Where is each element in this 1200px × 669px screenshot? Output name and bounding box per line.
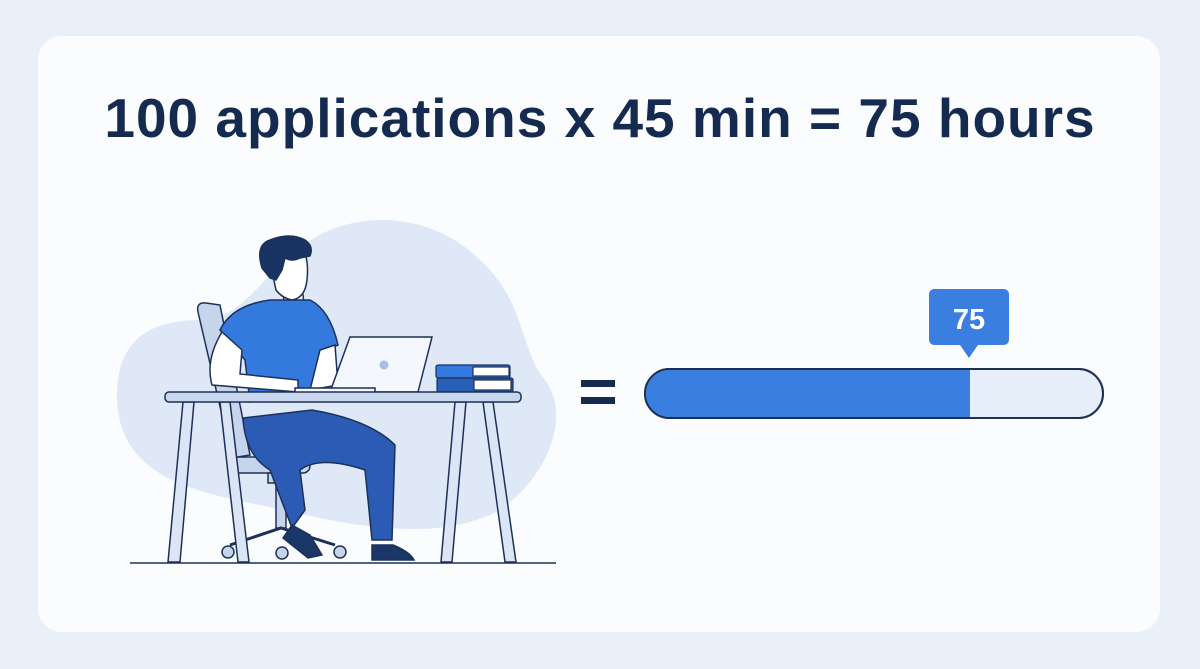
chair xyxy=(198,303,346,559)
tooltip: 75: 75 xyxy=(953,304,985,336)
floor line xyxy=(130,562,556,564)
title: 100 applications x 45 min = 75 hours xyxy=(104,87,1096,149)
equals sign xyxy=(581,380,615,404)
tooltip: 75 xyxy=(929,289,1009,358)
books xyxy=(436,365,513,392)
background blob xyxy=(117,220,556,529)
laptop xyxy=(295,337,432,393)
desk legs xyxy=(168,402,516,562)
desk top xyxy=(165,392,521,402)
person xyxy=(210,236,414,560)
progress bar xyxy=(645,369,1103,418)
